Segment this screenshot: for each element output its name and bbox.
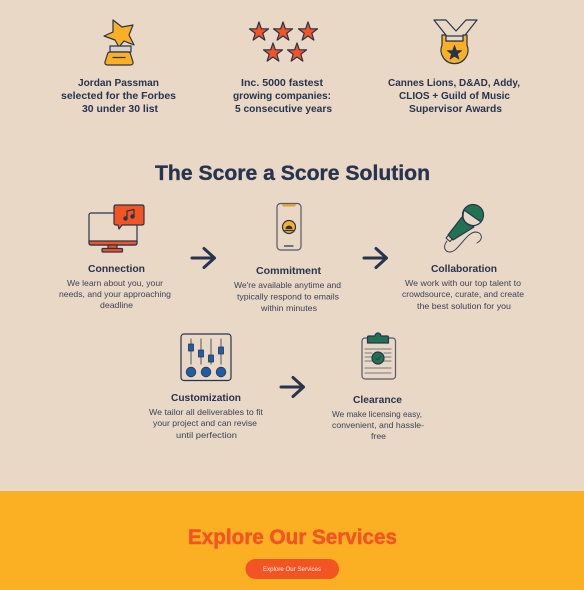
text: Connection: deadline: [100, 300, 133, 310]
text: Connection: We learn about you, your: [67, 278, 163, 288]
text: creative awards: [388, 78, 520, 115]
text: Inc. 5000 award: 5 consecutive years: [235, 104, 332, 115]
text: Commitment: [234, 266, 341, 313]
icon: clipboard: [362, 333, 396, 379]
button: explore services: [246, 559, 339, 579]
text: creative awards: Cannes Lions, D&AD, Addy,: [388, 78, 520, 89]
text: Forbes award: 30 under 30 list: [82, 104, 159, 115]
button: explore services: Explore Our Services: [263, 566, 322, 573]
text: Customization: Customization: [171, 393, 241, 404]
text: Connection: Connection: [88, 264, 145, 275]
icon: phone: [277, 204, 301, 250]
award: Cannes Lions and others: [388, 20, 520, 115]
text: Clearance: Clearance: [353, 395, 402, 406]
text: Clearance: We make licensing easy,: [332, 409, 422, 419]
step: Connection: [59, 205, 171, 310]
text: Customization: We tailor all deliverables to fit: [149, 407, 264, 417]
text: Clearance: convenient, and hassle-: [332, 420, 424, 430]
text: Forbes award: [61, 78, 176, 115]
icon: five stars: [249, 22, 318, 61]
panel: explore services: [0, 491, 584, 590]
text: Commitment: typically respond to emails: [237, 292, 339, 302]
arrow: Customization to Clearance: [281, 378, 304, 396]
heading: The Score a Score Solution: [155, 161, 430, 185]
step: Commitment: [234, 204, 341, 313]
icon: monitor with music bubble: [89, 205, 144, 252]
text: creative awards: CLIOS + Guild of Music: [399, 91, 510, 102]
icon: medal: [434, 20, 477, 64]
icon: microphone: [445, 204, 484, 252]
text: Connection: [59, 264, 171, 310]
step: Clearance: [332, 333, 424, 441]
text: creative awards: Supervisor Awards: [409, 104, 502, 115]
text: Commitment: within minutes: [260, 303, 317, 313]
text: Inc. 5000 award: growing companies:: [233, 91, 331, 102]
text: Inc. 5000 award: [233, 78, 332, 115]
heading: explore services: Explore Our Services: [188, 525, 397, 549]
text: Forbes award: selected for the Forbes: [61, 91, 176, 102]
icon: star trophy: [104, 20, 134, 65]
text: Collaboration: We work with our top talent to: [405, 278, 521, 288]
text: Collaboration: [402, 264, 524, 311]
text: Inc. 5000 award: Inc. 5000 fastest: [241, 78, 324, 89]
step: Customization: [149, 334, 264, 440]
text: Customization: your project and can revise: [153, 418, 257, 428]
text: Commitment: We're available anytime and: [234, 280, 341, 290]
text: Commitment: Commitment: [256, 266, 322, 277]
text: Clearance: [332, 395, 424, 441]
step: Collaboration: [402, 204, 524, 311]
text: Clearance: free: [371, 431, 386, 441]
text: Customization: until perfection: [176, 430, 237, 440]
text: Connection: needs, and your approaching: [59, 289, 171, 299]
award: Forbes 30 under 30: [61, 20, 176, 115]
arrow: Connection to Commitment: [192, 248, 214, 268]
award: Inc. 5000: [233, 22, 332, 115]
arrow: Commitment to Collaboration: [364, 248, 386, 268]
text: Collaboration: Collaboration: [431, 264, 497, 275]
text: Forbes award: Jordan Passman: [78, 78, 159, 89]
text: Collaboration: the best solution for you: [417, 301, 511, 311]
icon: mixer: [181, 334, 231, 380]
text: Collaboration: crowdsource, curate, and create: [402, 289, 524, 299]
text: Customization: [149, 393, 264, 440]
